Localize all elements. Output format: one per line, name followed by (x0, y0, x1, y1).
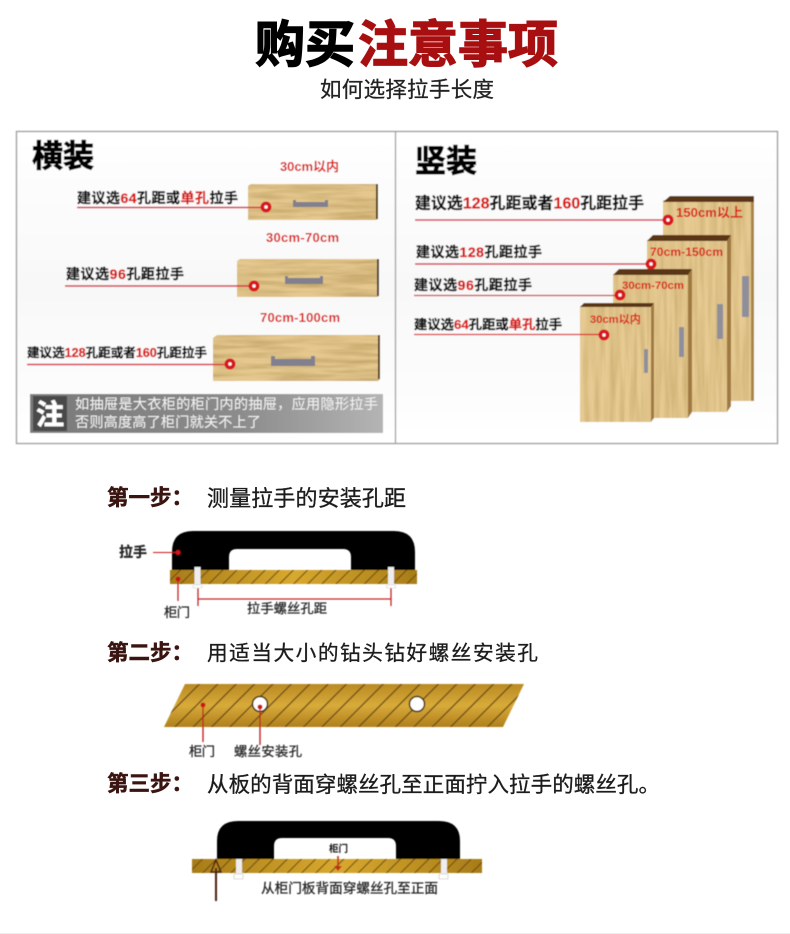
label: handle (119, 544, 180, 560)
door 1 (580, 303, 654, 422)
step 3 description: 从板的背面穿螺丝孔至正面拧入拉手的螺丝孔。 (207, 773, 660, 797)
step 2 description: 用适当大小的钻头钻好螺丝安装孔 (207, 642, 538, 665)
callout 1: 建议选128孔距或者160孔距拉手 (415, 194, 644, 212)
size labels (590, 205, 743, 326)
drawer 2: 30cm-70cm (266, 230, 339, 245)
drawer 2 (65, 230, 379, 297)
drill holes (252, 696, 424, 712)
label: screw hole: 螺丝安装孔 (234, 744, 302, 759)
screws (234, 859, 448, 879)
size labels: 70cm-150cm (650, 245, 723, 259)
drawer 2: 建议选96孔距拉手 (66, 266, 184, 282)
drawer 1: 建议选64孔距或单孔拉手 (77, 190, 238, 206)
heading: horizontal: 横装 (32, 139, 94, 174)
cabinet door board (192, 859, 482, 873)
callout 2 (415, 244, 656, 270)
title: 购买 (255, 17, 355, 73)
subtitle: 如何选择拉手长度 (320, 78, 494, 102)
label: door: 柜门 (329, 843, 348, 855)
panel: installation guide (16, 131, 778, 444)
callout 2: 建议选128孔距拉手 (416, 244, 542, 260)
arrow: red down to door (334, 856, 342, 871)
drawer 1: 30cm以内 (280, 159, 339, 174)
screws (193, 567, 396, 588)
label: handle: 拉手 (119, 544, 147, 560)
door 3 (647, 235, 731, 412)
step 3 heading: 第三步： (107, 772, 193, 796)
note box: 如抽屉是大衣柜的柜门内的抽屉，应用隐形拉手 (75, 396, 378, 413)
drawer 3 (27, 310, 380, 381)
door 4 (663, 196, 754, 401)
handle (172, 531, 415, 570)
callout 4: 建议选64孔距或单孔拉手 (414, 316, 562, 332)
door 2 (613, 269, 692, 418)
size labels: 30cm-70cm (622, 280, 684, 292)
label: door: 柜门 (164, 605, 190, 620)
dimension: hole spacing: 拉手螺丝孔距 (247, 601, 327, 616)
step 2 heading: 第二步： (107, 641, 193, 665)
step 1 description: 测量拉手的安装孔距 (207, 486, 406, 511)
step 1 diagram (119, 531, 417, 620)
handle (217, 821, 460, 859)
callout 3 (414, 277, 626, 300)
label: door (189, 702, 215, 759)
caption: 从柜门板背面穿螺丝孔至正面 (261, 881, 438, 896)
step 3 diagram (192, 821, 482, 901)
callout 1 (415, 194, 674, 226)
arrow: up through board (211, 860, 221, 901)
panel: horizontal mounting (27, 139, 383, 433)
drawer 3: 70cm-100cm (260, 310, 340, 325)
size labels: 30cm以内 (590, 312, 641, 326)
note box: 否则高度高了柜门就关不上了 (75, 414, 261, 431)
callout 4 (414, 316, 610, 340)
dimension: hole spacing (198, 588, 391, 616)
size labels: 150cm以上 (676, 205, 743, 220)
callout 3: 建议选96孔距拉手 (414, 277, 532, 293)
slanted wood board (164, 683, 524, 728)
note box: 注 (36, 399, 64, 430)
label: door (164, 576, 190, 620)
step 1 heading: 第一步： (107, 486, 193, 510)
heading: vertical: 竖装 (415, 144, 477, 179)
cabinet door board (170, 570, 417, 584)
drawer 3: 建议选128孔距或者160孔距拉手 (27, 345, 207, 360)
panel: vertical mounting (414, 144, 754, 422)
title (255, 17, 558, 73)
step 2 diagram (160, 680, 530, 759)
drawer 1 (77, 159, 378, 220)
label: door: 柜门 (189, 744, 215, 759)
label: screw hole (234, 704, 302, 759)
title: 注意事项 (358, 17, 558, 73)
note box (30, 394, 383, 433)
